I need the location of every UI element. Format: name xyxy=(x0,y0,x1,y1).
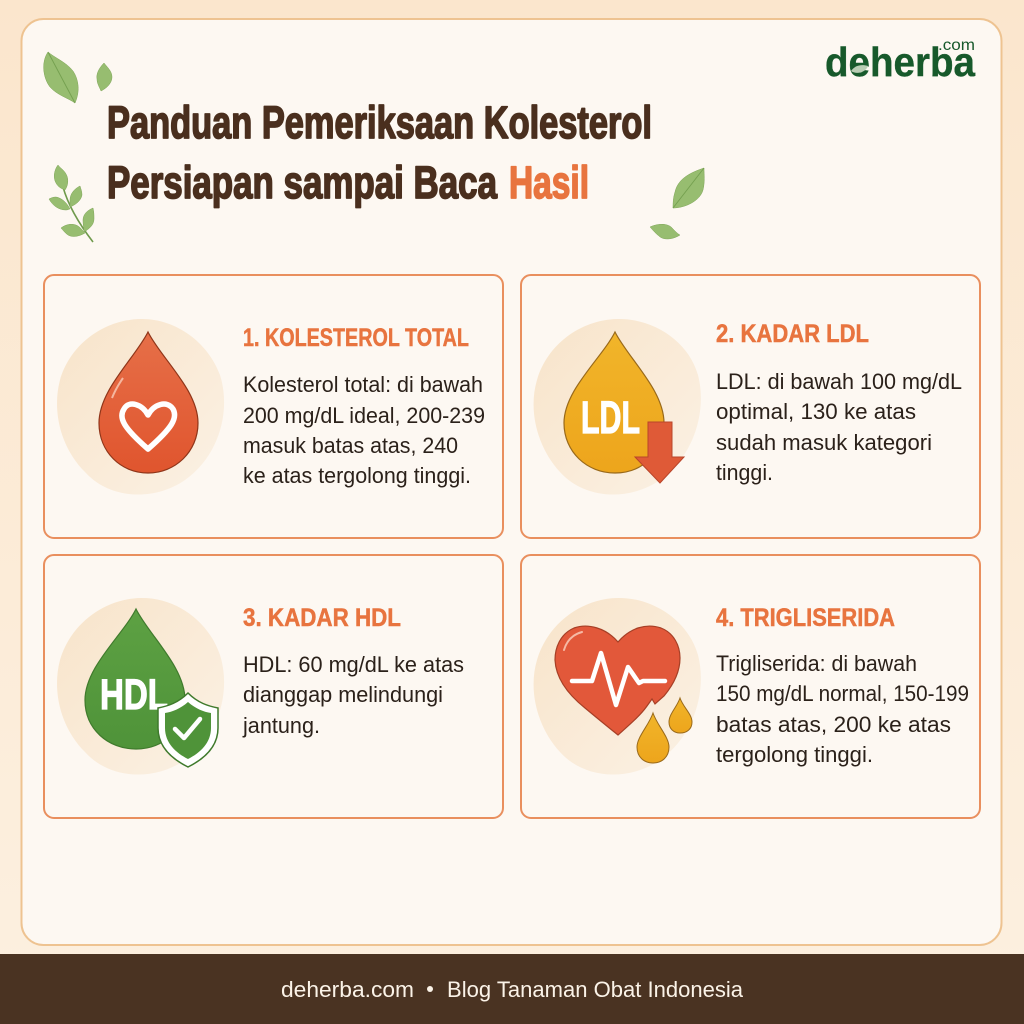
icon: yellow LDL drop with down arrow: LDL xyxy=(581,392,640,443)
body text: tergolong tinggi. xyxy=(716,742,873,767)
title: Hasil xyxy=(509,157,589,208)
heading: 4. TRIGLISERIDA xyxy=(716,604,895,632)
body text: 200 mg/dL ideal, 200-239 xyxy=(243,403,485,428)
body text xyxy=(716,369,962,485)
panel: kadar HDL xyxy=(44,555,503,818)
icon: red drop with heart xyxy=(57,319,224,495)
body text: masuk batas atas, 240 xyxy=(243,433,458,458)
body text: batas atas, 200 ke atas xyxy=(716,712,951,737)
logo: deherba xyxy=(825,39,976,85)
panel: kolesterol total xyxy=(44,275,503,538)
footer band xyxy=(0,954,1024,1024)
icon: green HDL drop with shield: HDL xyxy=(100,671,168,719)
footer band: deherba.com xyxy=(281,977,414,1002)
panel: trigliserida xyxy=(521,555,980,818)
body text xyxy=(242,652,464,738)
body text: dianggap melindungi xyxy=(243,682,443,707)
icon: green HDL drop with shield xyxy=(57,598,224,775)
logo: .com xyxy=(938,37,975,54)
title: Persiapan sampai Baca xyxy=(107,157,498,208)
title: Panduan Pemeriksaan Kolesterol xyxy=(107,97,652,148)
heading: 2. KADAR LDL xyxy=(716,320,869,348)
body text: Kolesterol total: di bawah xyxy=(243,372,483,397)
panel: kadar LDL xyxy=(521,275,980,538)
decorative leaves: right of title xyxy=(650,168,704,239)
decorative leaves: top left xyxy=(44,52,112,103)
heading: 3. KADAR HDL xyxy=(243,604,401,632)
decorative sprig xyxy=(49,165,94,242)
body text xyxy=(716,651,969,767)
body text: ke atas tergolong tinggi. xyxy=(243,463,471,488)
body text: 150 mg/dL normal, 150-199 xyxy=(716,681,969,706)
body text xyxy=(243,372,485,488)
body text: optimal, 130 ke atas xyxy=(716,399,916,424)
heading: 1. KOLESTEROL TOTAL xyxy=(243,324,469,352)
icon: heart with pulse and oil drops xyxy=(534,598,701,775)
body text: sudah masuk kategori xyxy=(716,430,932,455)
body text: tinggi. xyxy=(716,460,773,485)
body text: jantung. xyxy=(242,713,320,738)
body text: LDL: di bawah 100 mg/dL xyxy=(716,369,962,394)
footer band: Blog Tanaman Obat Indonesia xyxy=(447,977,744,1002)
icon: yellow LDL drop with down arrow xyxy=(534,319,701,495)
body text: HDL: 60 mg/dL ke atas xyxy=(243,652,464,677)
title xyxy=(107,97,652,208)
body text: Trigliserida: di bawah xyxy=(716,651,917,676)
